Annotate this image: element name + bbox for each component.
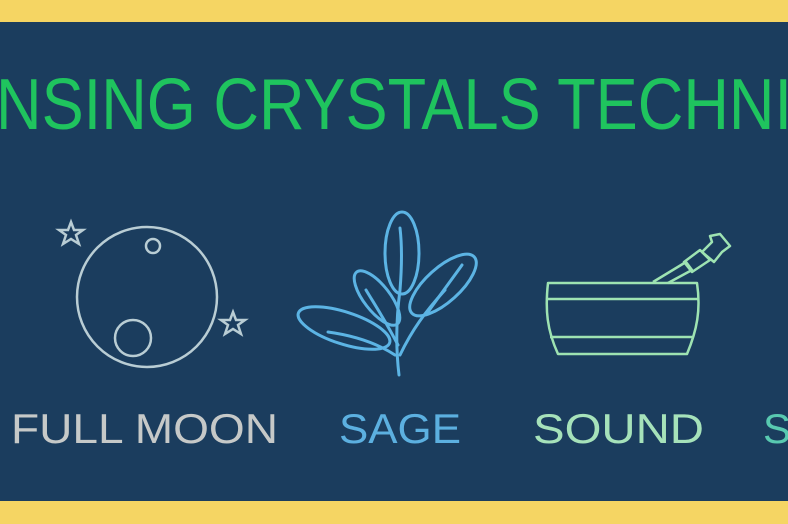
label: sound: SOUND bbox=[533, 405, 704, 452]
icon: full moon bbox=[59, 222, 245, 367]
top yellow border bbox=[0, 0, 788, 22]
bottom yellow border bbox=[0, 501, 788, 524]
icon: singing bowl bbox=[547, 234, 730, 354]
icon: sage bbox=[293, 212, 486, 375]
label: sage: SAGE bbox=[339, 405, 461, 452]
label: full moon: FULL MOON bbox=[11, 405, 278, 452]
